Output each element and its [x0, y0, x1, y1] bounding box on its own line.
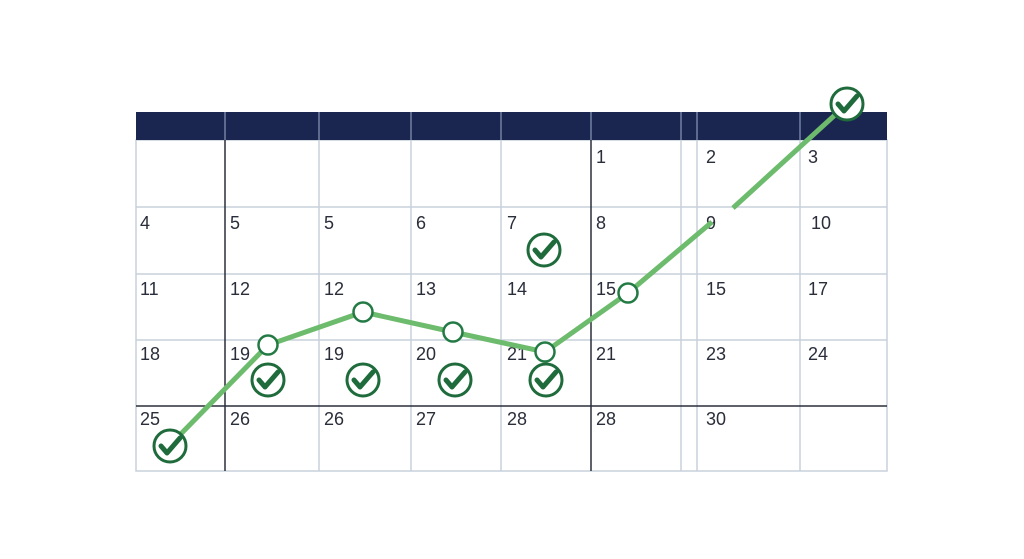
day numbers: 26: [324, 409, 344, 429]
day numbers: 19: [230, 344, 250, 364]
progress line: [170, 104, 847, 445]
day numbers: 4: [140, 213, 150, 233]
day numbers: 14: [507, 279, 527, 299]
day numbers: 1: [596, 147, 606, 167]
day numbers: 9: [706, 213, 716, 233]
day numbers: 3: [808, 147, 818, 167]
day numbers: 28: [596, 409, 616, 429]
day numbers: 30: [706, 409, 726, 429]
day numbers: 24: [808, 344, 828, 364]
day numbers: 7: [507, 213, 517, 233]
day numbers: 20: [416, 344, 436, 364]
day numbers: 27: [416, 409, 436, 429]
day numbers: 15: [596, 279, 616, 299]
day numbers: 12: [230, 279, 250, 299]
day numbers: 6: [416, 213, 426, 233]
day numbers: 28: [507, 409, 527, 429]
day numbers: 10: [811, 213, 831, 233]
day numbers: 12: [324, 279, 344, 299]
day numbers: [140, 147, 831, 429]
day numbers: 5: [230, 213, 240, 233]
day numbers: 8: [596, 213, 606, 233]
day numbers: 2: [706, 147, 716, 167]
day numbers: 21: [596, 344, 616, 364]
day numbers: 21: [507, 344, 527, 364]
day numbers: 15: [706, 279, 726, 299]
day numbers: 23: [706, 344, 726, 364]
header bar: [136, 112, 887, 140]
day numbers: 17: [808, 279, 828, 299]
milestone circles: [258, 284, 638, 362]
day numbers: 19: [324, 344, 344, 364]
check icons: [154, 88, 863, 462]
day numbers: 18: [140, 344, 160, 364]
day numbers: 25: [140, 409, 160, 429]
day numbers: 13: [416, 279, 436, 299]
day numbers: 5: [324, 213, 334, 233]
calendar grid: [136, 140, 887, 471]
day numbers: 11: [140, 279, 159, 299]
day numbers: 26: [230, 409, 250, 429]
